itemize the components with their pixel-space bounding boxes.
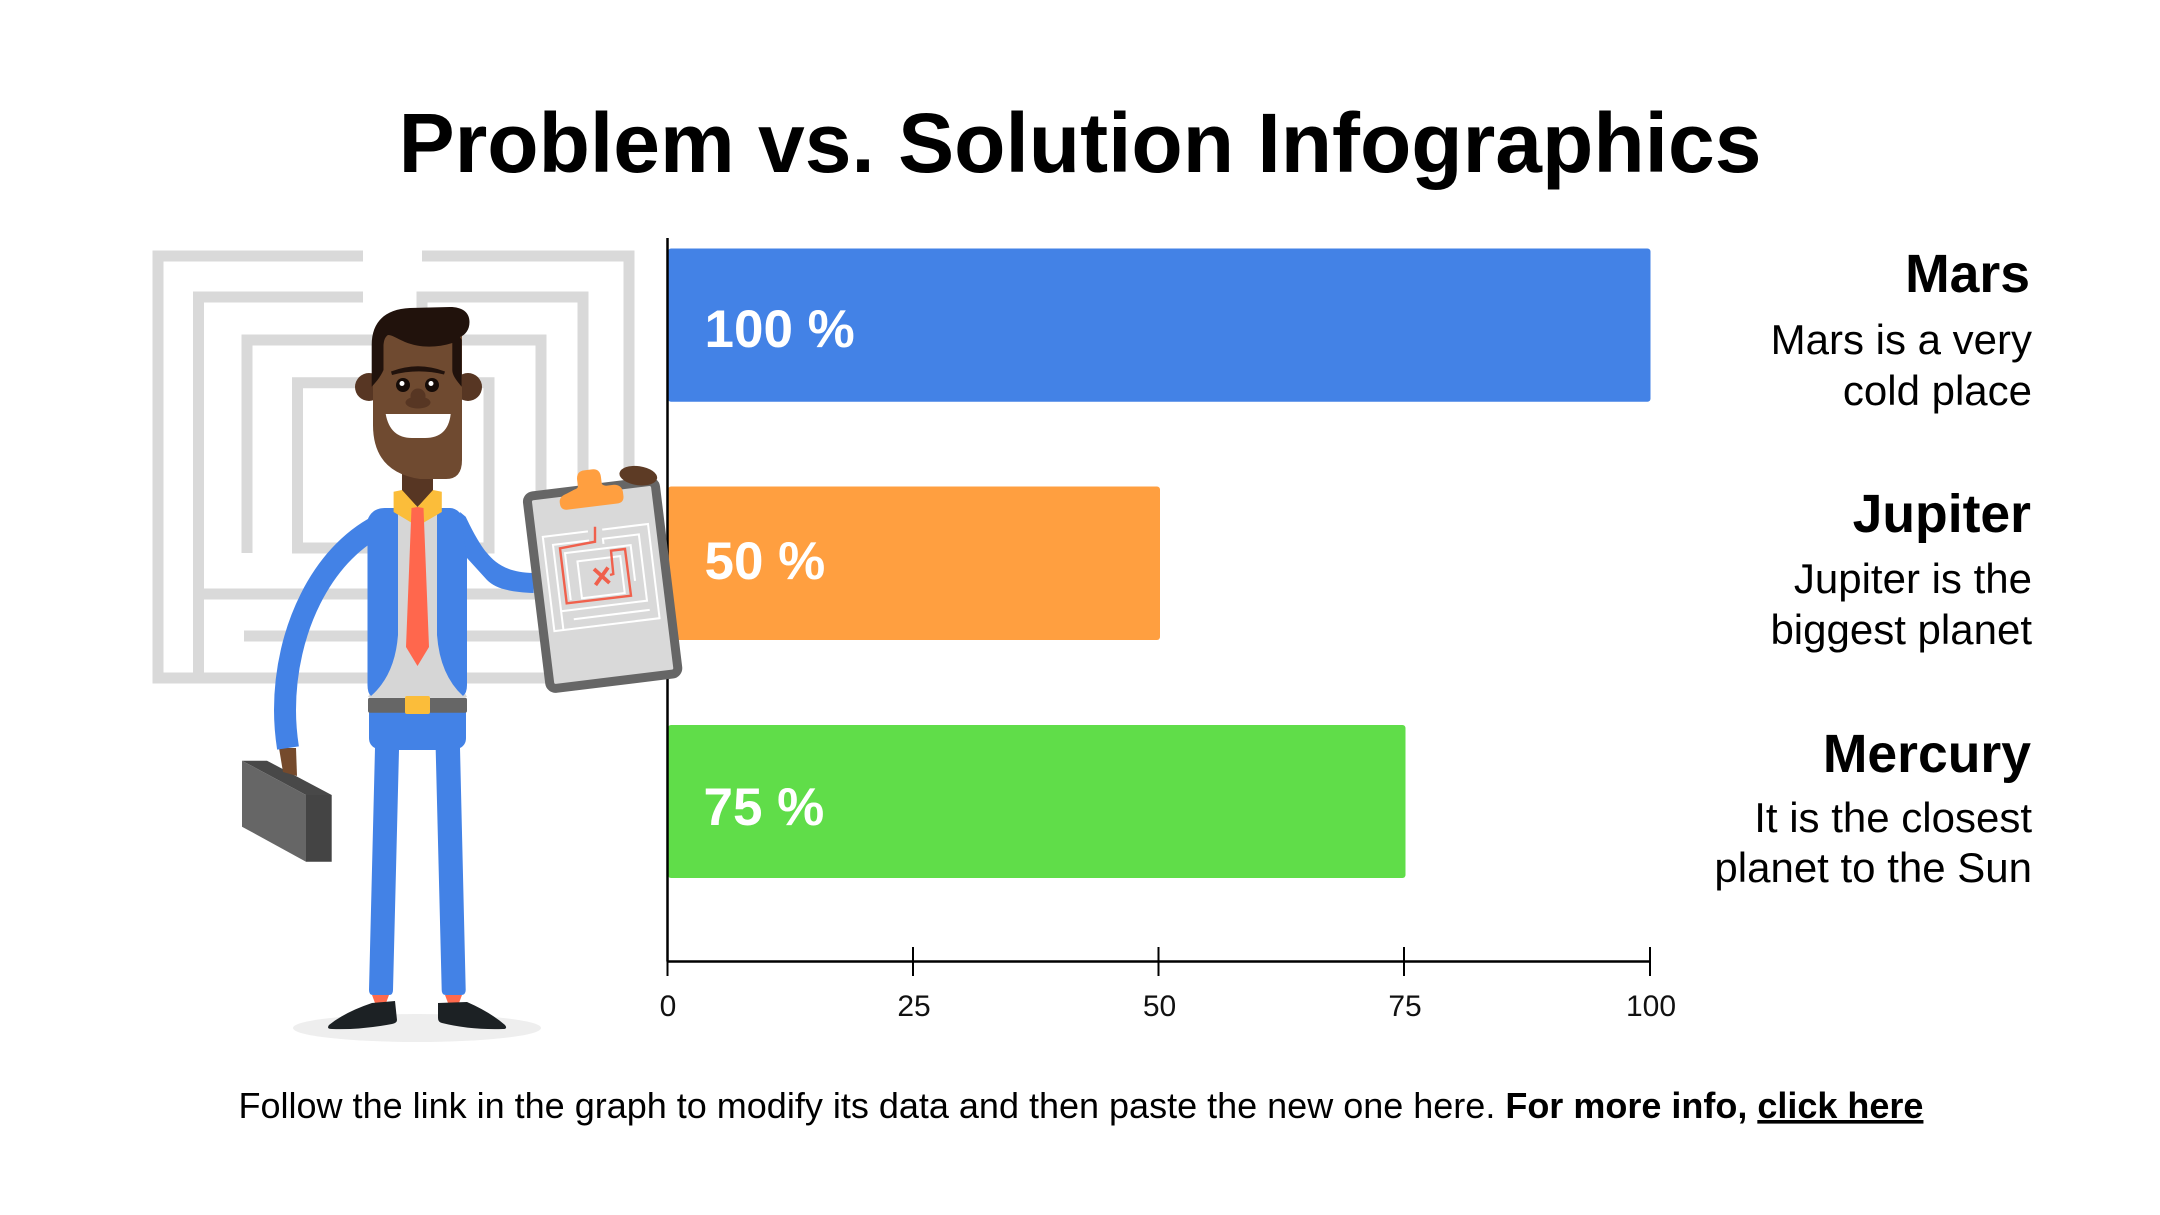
head	[355, 307, 482, 479]
left arm	[285, 526, 378, 748]
ground shadow	[293, 1014, 541, 1042]
footer note: Follow the link in the graph to modify its data and then paste the new one here. For more info, click here	[239, 1085, 1923, 1126]
bar: Mars 100	[668, 248, 1650, 402]
neck point	[402, 489, 433, 507]
legend text: Mercury	[1714, 725, 2032, 891]
legend text: Mercury: Mercury	[1823, 725, 2031, 784]
belt	[368, 696, 467, 714]
legend text: Mars	[1771, 245, 2032, 414]
legend text: Jupiter: Jupiter	[1853, 485, 2031, 544]
clipboard	[524, 462, 678, 689]
legend text: Jupiter: biggest planet	[1770, 606, 2032, 653]
value axis	[668, 238, 1650, 976]
legend text: Mars: cold place	[1843, 367, 2032, 414]
axis labels: 25	[897, 990, 931, 1023]
character illustration	[242, 307, 678, 1042]
red x mark	[594, 568, 610, 585]
shirt	[368, 505, 467, 697]
legend text: Mercury: planet to the Sun	[1714, 844, 2032, 891]
legend text: Jupiter	[1770, 485, 2032, 653]
legend text: Mars: Mars	[1905, 245, 2030, 304]
mini maze	[543, 524, 660, 631]
bar chart	[660, 238, 1676, 1023]
mini maze red route	[560, 527, 631, 603]
clipboard clip	[556, 466, 624, 510]
axis labels	[660, 990, 1676, 1023]
neck	[402, 470, 433, 507]
bar: Mercury 75: 75 %	[704, 778, 824, 837]
briefcase	[242, 748, 332, 862]
legend text: Mars: Mars is a very	[1771, 316, 2032, 363]
legs	[369, 712, 466, 995]
axis labels: 0	[660, 990, 676, 1023]
bar: Jupiter 50: 50 %	[704, 532, 825, 591]
shoes	[328, 1001, 506, 1029]
socks	[372, 995, 462, 1003]
axis labels: 100	[1626, 990, 1676, 1023]
hand	[618, 464, 658, 488]
collar	[394, 490, 442, 523]
legend text: Jupiter: Jupiter is the	[1794, 555, 2032, 602]
legend text: Mercury: It is the closest	[1754, 794, 2032, 841]
bar: Jupiter 50	[668, 486, 1160, 640]
axis labels: 50	[1143, 990, 1176, 1023]
tie	[406, 507, 429, 666]
jacket	[368, 508, 467, 696]
title: Problem vs. Solution Infographics	[399, 96, 1761, 190]
right arm	[460, 512, 534, 593]
bar: Mars 100: 100 %	[704, 300, 855, 359]
maze background	[158, 256, 629, 678]
bar: Mercury 75	[668, 725, 1406, 878]
axis labels: 75	[1388, 990, 1422, 1023]
